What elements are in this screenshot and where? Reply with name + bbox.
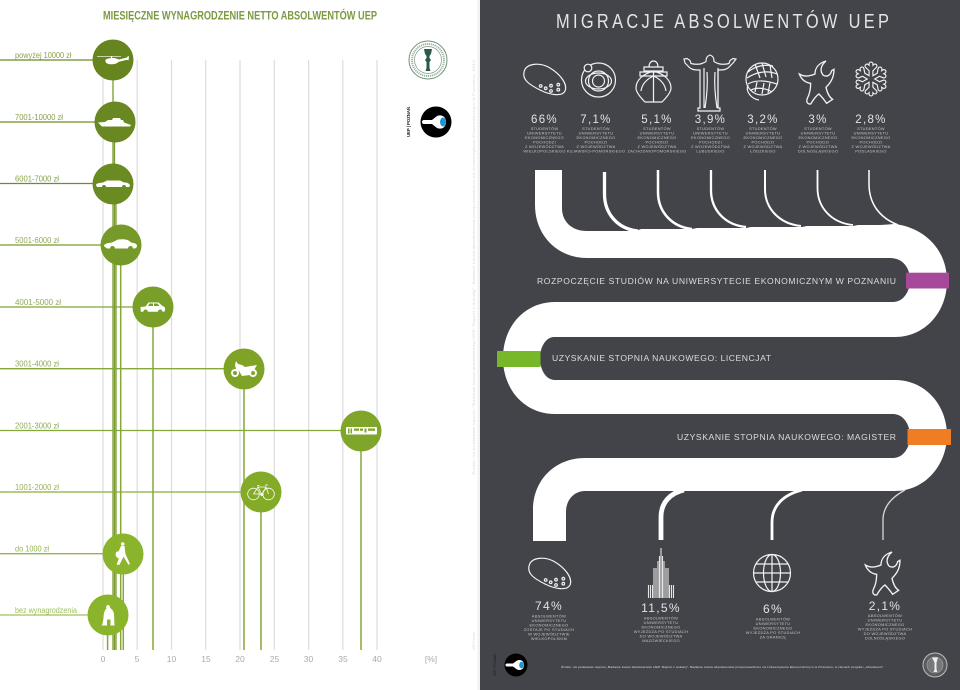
stat: Zachodniopomorskie 5,1%: Z WOJEWÓDZTWA xyxy=(638,144,677,149)
stat: Dolnośląskie 2,1%: DOLNOŚLĄSKIEGO xyxy=(865,636,905,640)
stat: Podlaskie 2,8%: Z WOJEWÓDZTWA xyxy=(852,144,891,149)
stat: Kujawsko-Pomorskie 7,1%: EKONOMICZNEGO xyxy=(577,135,615,140)
stat: Dolnośląskie 3%: POCHODZI xyxy=(807,140,829,144)
stat: Dolnośląskie 2,1%: ABSOLWENTÓW xyxy=(868,613,902,618)
icon: Wielkopolskie xyxy=(524,64,566,95)
stat: Podlaskie 2,8% xyxy=(852,114,891,154)
stat: Dolnośląskie 3%: 3% xyxy=(808,114,828,126)
stat: Lubuskie 3,9%: POCHODZI xyxy=(699,140,722,144)
stat: Zachodniopomorskie 5,1%: EKONOMICZNEGO xyxy=(638,135,676,140)
stat: Dolnośląskie 2,1% xyxy=(858,599,912,640)
axis labels: 40 xyxy=(372,654,382,664)
stat: Kujawsko-Pomorskie 7,1%: Z WOJEWÓDZTWA xyxy=(577,144,616,149)
axis labels: 5 xyxy=(135,654,140,664)
stat: Kujawsko-Pomorskie 7,1%: 7,1% xyxy=(580,114,612,126)
stat: Łódzkie 3,2%: Z WOJEWÓDZTWA xyxy=(744,144,783,149)
stat: Podlaskie 2,8%: POCHODZI xyxy=(860,140,882,144)
stat: abroad 6%: EKONOMICZNEGO xyxy=(754,626,792,630)
stat: abroad 6%: ABSOLWENTÓW xyxy=(756,616,790,622)
stat: Wielkopolskie 66%: WIELKOPOLSKIEGO xyxy=(523,148,566,154)
stat: Mazowieckie 11,5% xyxy=(634,601,688,643)
stat: Wielkopolskie 66%: Z WOJEWÓDZTWA xyxy=(525,144,564,149)
stat: stays in Wielkopolska 74% xyxy=(524,599,574,641)
axis labels: 10 xyxy=(167,654,176,664)
row labels: bez wynagrodzenia xyxy=(15,605,77,615)
stat: Kujawsko-Pomorskie 7,1%: KUJAWSKO-POMORSKIEGO xyxy=(567,148,625,154)
title: monthly salary: MIESIĘCZNE WYNAGRODZENIE NETTO ABSOLWENTÓW UEP xyxy=(103,10,377,22)
axis labels: 35 xyxy=(338,654,348,664)
logo: UEP Poznań footer xyxy=(493,654,528,676)
marker: start of studies xyxy=(906,273,949,288)
row labels: 5001-6000 zł xyxy=(15,235,59,245)
icon: globe xyxy=(754,554,790,592)
row labels: do 1000 zł xyxy=(15,544,49,554)
icon: Christ statue xyxy=(684,55,736,111)
icon: dwarf bottom xyxy=(865,552,900,595)
row labels: 4001-5000 zł xyxy=(15,297,61,307)
chart: river of graduate flow xyxy=(503,170,947,541)
stat: Wielkopolskie 66%: STUDENTÓW xyxy=(531,126,558,131)
logo: UEP Poznań key xyxy=(406,106,452,138)
stat: Zachodniopomorskie 5,1%: POCHODZI xyxy=(646,140,668,144)
stat: Podlaskie 2,8%: UNIWERSYTETU xyxy=(854,130,888,136)
stat: Mazowieckie 11,5%: MAZOWIECKIEGO xyxy=(642,638,680,643)
stat: Dolnośląskie 3%: DOLNOŚLĄSKIEGO xyxy=(798,148,838,154)
icon: walking person xyxy=(102,534,144,574)
stat: Zachodniopomorskie 5,1%: UNIWERSYTETU xyxy=(640,130,674,136)
stat: Łódzkie 3,2%: ŁÓDZKIEGO xyxy=(750,148,776,154)
stat: Lubuskie 3,9%: 3,9% xyxy=(695,114,726,126)
stat: stays in Wielkopolska 74%: EKONOMICZNEGO xyxy=(530,622,568,628)
row labels xyxy=(15,50,77,615)
icon: helicopter xyxy=(92,40,134,80)
axis labels: [%] xyxy=(425,654,437,664)
stat: Dolnośląskie 3%: STUDENTÓW xyxy=(804,126,832,131)
stat: Łódzkie 3,2% xyxy=(744,114,783,154)
icon: limousine xyxy=(92,164,134,204)
credit note: UEP Poznań xyxy=(472,632,476,650)
stat: Lubuskie 3,9% xyxy=(691,114,730,154)
stat: Mazowieckie 11,5%: UNIWERSYTETU xyxy=(644,620,678,625)
stat: Kujawsko-Pomorskie 7,1%: POCHODZI xyxy=(585,140,607,144)
stat: Kujawsko-Pomorskie 7,1%: STUDENTÓW xyxy=(582,126,610,131)
stat: Podlaskie 2,8%: STUDENTÓW xyxy=(857,126,885,131)
icon: car xyxy=(100,224,142,266)
stat: Mazowieckie 11,5%: 11,5% xyxy=(641,601,681,615)
chart: salary distribution xyxy=(0,40,437,664)
stat: Lubuskie 3,9%: LUBUSKIEGO xyxy=(696,148,725,154)
source note footer: Źródło: na podstawie raportu „Badanie losów absolwentów UEP. Raport z ankiety”. Badanie losów absolwentów przeprowadzono na Uniwersytecie Ekonomicznym w Poznaniu, w ramach projektu „Absolwent” xyxy=(561,664,883,669)
logo: UEP Poznań key: UEP | POZNAŃ xyxy=(406,107,411,137)
marker: bachelor xyxy=(497,351,540,367)
stat: abroad 6%: WYJEŻDŻA PO STUDIACH xyxy=(746,630,800,635)
logo: university seal xyxy=(409,41,447,79)
stat: stays in Wielkopolska 74%: ZOSTAJE PO STUDIACH xyxy=(524,627,574,632)
stat: Zachodniopomorskie 5,1% xyxy=(628,114,686,154)
icon: skyscraper xyxy=(648,548,674,598)
icon: ship xyxy=(636,61,671,102)
stat: stays in Wielkopolska 74%: 74% xyxy=(535,599,563,613)
stat: Wielkopolskie 66% xyxy=(523,114,566,154)
stat: Łódzkie 3,2%: UNIWERSYTETU xyxy=(746,130,780,136)
stat: Wielkopolskie 66%: 66% xyxy=(531,114,558,126)
stat: Łódzkie 3,2%: EKONOMICZNEGO xyxy=(744,135,782,140)
stat: Dolnośląskie 3%: UNIWERSYTETU xyxy=(801,130,835,136)
stat: stays in Wielkopolska 74%: UNIWERSYTETU xyxy=(532,618,566,623)
stat: Lubuskie 3,9%: UNIWERSYTETU xyxy=(693,130,728,136)
icon: dwarf xyxy=(799,61,834,104)
stat: stays in Wielkopolska 74%: ABSOLWENTÓW xyxy=(532,614,566,618)
stat: Mazowieckie 11,5%: EKONOMICZNEGO xyxy=(642,624,680,630)
stat: stays in Wielkopolska 74%: WIELKOPOLSKIM xyxy=(531,636,567,641)
stat: Wielkopolskie 66%: EKONOMICZNEGO xyxy=(525,135,564,140)
panel: migration background xyxy=(480,0,960,690)
logo: UEP Poznań footer: UEP | POZNAŃ xyxy=(493,654,497,676)
row labels: powyżej 10000 zł xyxy=(15,50,72,60)
stat: Dolnośląskie 3%: EKONOMICZNEGO xyxy=(799,135,837,140)
icon: motorcycle xyxy=(224,348,264,390)
stat: Mazowieckie 11,5%: WYJEŻDŻA PO STUDIACH xyxy=(634,629,688,634)
stat: Podlaskie 2,8%: 2,8% xyxy=(855,114,887,126)
stat: Zachodniopomorskie 5,1%: STUDENTÓW xyxy=(643,126,671,131)
icon: bicycle xyxy=(240,472,282,512)
stat: Wielkopolskie 66%: UNIWERSYTETU xyxy=(527,130,562,136)
icon: Kujawsko-Pomorskie xyxy=(582,63,616,97)
icon: yacht xyxy=(94,102,136,142)
axis labels xyxy=(101,654,437,664)
stat: Dolnośląskie 2,1%: WYJEŻDŻA PO STUDIACH xyxy=(858,626,912,632)
outflow branches xyxy=(661,490,905,540)
stat: Łódzkie 3,2%: 3,2% xyxy=(747,114,779,126)
stat: Dolnośląskie 3% xyxy=(798,114,838,154)
icon: small car xyxy=(132,286,174,328)
icon: sitting person xyxy=(88,594,128,636)
stat: Lubuskie 3,9%: EKONOMICZNEGO xyxy=(691,135,730,140)
stat: Zachodniopomorskie 5,1%: 5,1% xyxy=(641,114,673,126)
axis labels: 15 xyxy=(201,654,211,664)
stat: abroad 6%: 6% xyxy=(763,602,783,616)
stat: Łódzkie 3,2%: POCHODZI xyxy=(752,140,774,144)
stat: abroad 6%: ZA GRANICĘ xyxy=(760,634,786,640)
icon: bus xyxy=(340,410,382,452)
stat: Lubuskie 3,9%: STUDENTÓW xyxy=(697,126,724,131)
row labels: 3001-4000 zł xyxy=(15,358,59,368)
icon: ball of yarn xyxy=(746,63,778,100)
label: start of studies: ROZPOCZĘCIE STUDIÓW NA UNIWERSYTECIE EKONOMICZNYM W POZNANIU xyxy=(537,276,896,286)
axis labels: 30 xyxy=(304,654,313,664)
icon: Wielkopolska bottom xyxy=(529,558,571,589)
logo: seal footer xyxy=(923,653,947,677)
source note: Źródło: na podstawie raportu "Badanie losów absolwentów UEP. Raport z ankiety". Badanie losów absolwentów przeprowadzono na Uniwersytecie Ekonomicznym w Poznaniu, 2013 xyxy=(471,60,476,475)
stat: Mazowieckie 11,5%: ABSOLWENTÓW xyxy=(644,616,678,620)
stat: Dolnośląskie 2,1%: 2,1% xyxy=(869,599,901,613)
stat: Wielkopolskie 66%: POCHODZI xyxy=(533,140,556,144)
row labels: 2001-3000 zł xyxy=(15,420,59,430)
stat: Dolnośląskie 2,1%: EKONOMICZNEGO xyxy=(866,622,904,627)
stat: Lubuskie 3,9%: Z WOJEWÓDZTWA xyxy=(691,144,730,149)
stat: stays in Wielkopolska 74%: W WOJEWÓDZTWIE xyxy=(528,632,570,636)
stat: Podlaskie 2,8%: PODLASKIEGO xyxy=(855,148,887,154)
row labels: 1001-2000 zł xyxy=(15,482,59,492)
stat: abroad 6% xyxy=(746,602,800,640)
stat: Zachodniopomorskie 5,1%: ZACHODNIOPOMORSKIEGO xyxy=(628,148,686,154)
axis labels: 20 xyxy=(235,654,245,664)
stat: Podlaskie 2,8%: EKONOMICZNEGO xyxy=(852,135,890,140)
title: migration: MIGRACJE ABSOLWENTÓW UEP xyxy=(556,9,889,32)
stat: Mazowieckie 11,5%: DO WOJEWÓDZTWA xyxy=(640,634,682,638)
stat: Dolnośląskie 2,1%: UNIWERSYTETU xyxy=(868,618,902,622)
label: master: UZYSKANIE STOPNIA NAUKOWEGO: MAGISTER xyxy=(677,432,896,442)
axis labels: 0 xyxy=(101,654,106,664)
stat: Dolnośląskie 2,1%: DO WOJEWÓDZTWA xyxy=(864,631,906,636)
stat: Łódzkie 3,2%: STUDENTÓW xyxy=(749,126,777,131)
stat: Kujawsko-Pomorskie 7,1% xyxy=(567,114,625,154)
marker: master xyxy=(908,429,951,445)
label: bachelor: UZYSKANIE STOPNIA NAUKOWEGO: LICENCJAT xyxy=(552,353,772,363)
axis labels: 25 xyxy=(270,654,279,664)
stat: Dolnośląskie 3%: Z WOJEWÓDZTWA xyxy=(799,144,838,149)
row labels: 7001-10000 zł xyxy=(15,112,63,122)
icon: snowflake xyxy=(858,64,884,94)
stat: Kujawsko-Pomorskie 7,1%: UNIWERSYTETU xyxy=(579,130,613,136)
stat: abroad 6%: UNIWERSYTETU xyxy=(756,621,790,626)
row labels: 6001-7000 zł xyxy=(15,174,59,184)
inflow branches xyxy=(604,170,898,231)
